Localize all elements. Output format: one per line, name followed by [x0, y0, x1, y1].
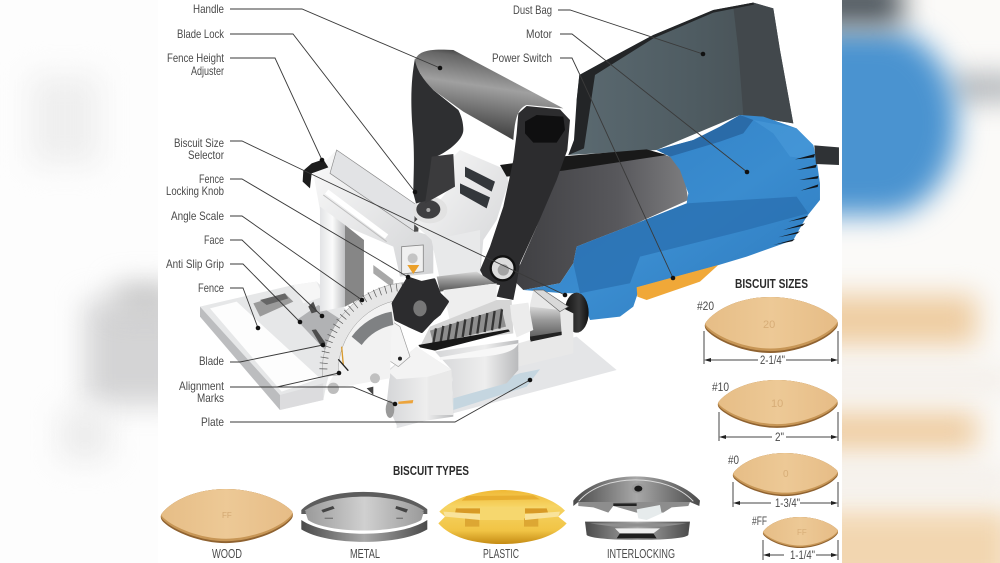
front arm	[480, 106, 570, 300]
size #FF: FF	[797, 528, 807, 537]
black stripe	[500, 149, 667, 177]
front block	[387, 347, 453, 425]
black end cap	[565, 293, 589, 333]
part labels: Motor	[526, 27, 552, 41]
blue motor shell	[523, 115, 820, 320]
part labels: Plate	[201, 415, 224, 429]
left leg	[411, 58, 463, 203]
blurred left backdrop	[0, 0, 158, 563]
part labels: Fence	[198, 281, 224, 295]
size #10: 2"	[775, 432, 784, 444]
leader dots	[256, 52, 749, 406]
part labels: Selector	[188, 148, 224, 162]
size #20: #20	[697, 301, 714, 313]
biscuit type: interlocking	[573, 476, 700, 561]
height adjuster knob	[303, 159, 328, 188]
size #FF: #FF	[752, 516, 767, 528]
biscuit type: interlocking: INTERLOCKING	[607, 547, 675, 561]
part labels: Angle Scale	[171, 209, 224, 223]
heading: biscuit sizes: BISCUIT SIZES	[735, 277, 808, 291]
main white housing	[413, 150, 508, 280]
spring coils	[430, 308, 506, 344]
part labels: Locking Knob	[166, 184, 224, 198]
part labels: Fence	[199, 172, 224, 186]
fence upright and columns	[313, 150, 433, 312]
part labels: Marks	[197, 391, 224, 405]
biscuit joiner illustration	[200, 3, 839, 428]
size #20: 20	[763, 319, 775, 331]
biscuit type: plastic	[438, 490, 567, 561]
size #10: 10	[771, 398, 783, 410]
handle	[411, 50, 570, 300]
plate	[397, 337, 617, 428]
biscuit type: metal	[301, 492, 427, 561]
size #20: 2-1/4"	[760, 355, 785, 367]
part labels: Power Switch	[492, 51, 552, 65]
lower curved block	[435, 340, 518, 398]
size #10: #10	[712, 382, 729, 394]
part labels: Anti Slip Grip	[166, 257, 224, 271]
size #0: #0	[728, 455, 739, 467]
part labels: Biscuit Size	[174, 136, 224, 150]
angle scale	[322, 282, 408, 395]
heading: biscuit types: BISCUIT TYPES	[393, 464, 469, 478]
size #10	[712, 376, 838, 444]
carriage, spring and rear block	[386, 272, 589, 425]
part labels: Fence Height	[167, 51, 225, 65]
gray body	[513, 149, 688, 290]
dust bag	[568, 3, 793, 155]
size #0	[728, 450, 838, 510]
size #20	[697, 293, 838, 367]
biscuit type: wood: WOOD	[212, 547, 242, 561]
locking knob	[393, 278, 447, 331]
leader lines	[230, 9, 747, 422]
biscuit type: metal: METAL	[350, 547, 380, 561]
part labels: Alignment	[179, 379, 225, 393]
part labels: Adjuster	[191, 64, 224, 78]
size #0: 0	[783, 469, 789, 480]
biscuit type: wood	[161, 485, 293, 561]
motor housing	[500, 115, 839, 320]
size #FF	[752, 515, 838, 562]
block	[510, 303, 533, 337]
blurred right backdrop	[842, 0, 1000, 563]
part labels: Handle	[193, 2, 224, 16]
back support	[518, 290, 573, 367]
size #FF: 1-1/4"	[790, 550, 815, 562]
part labels: Blade	[199, 354, 224, 368]
part labels: Dust Bag	[513, 3, 552, 17]
part labels: Blade Lock	[177, 27, 225, 41]
part labels	[166, 2, 552, 429]
size #0: 1-3/4"	[775, 498, 800, 510]
orange switch	[637, 265, 718, 300]
part labels: Face	[204, 233, 224, 247]
grip tube	[415, 50, 563, 140]
fence base frame	[200, 282, 347, 410]
biscuit type: plastic: PLASTIC	[483, 547, 519, 561]
biscuit type: wood: FF	[222, 511, 232, 520]
